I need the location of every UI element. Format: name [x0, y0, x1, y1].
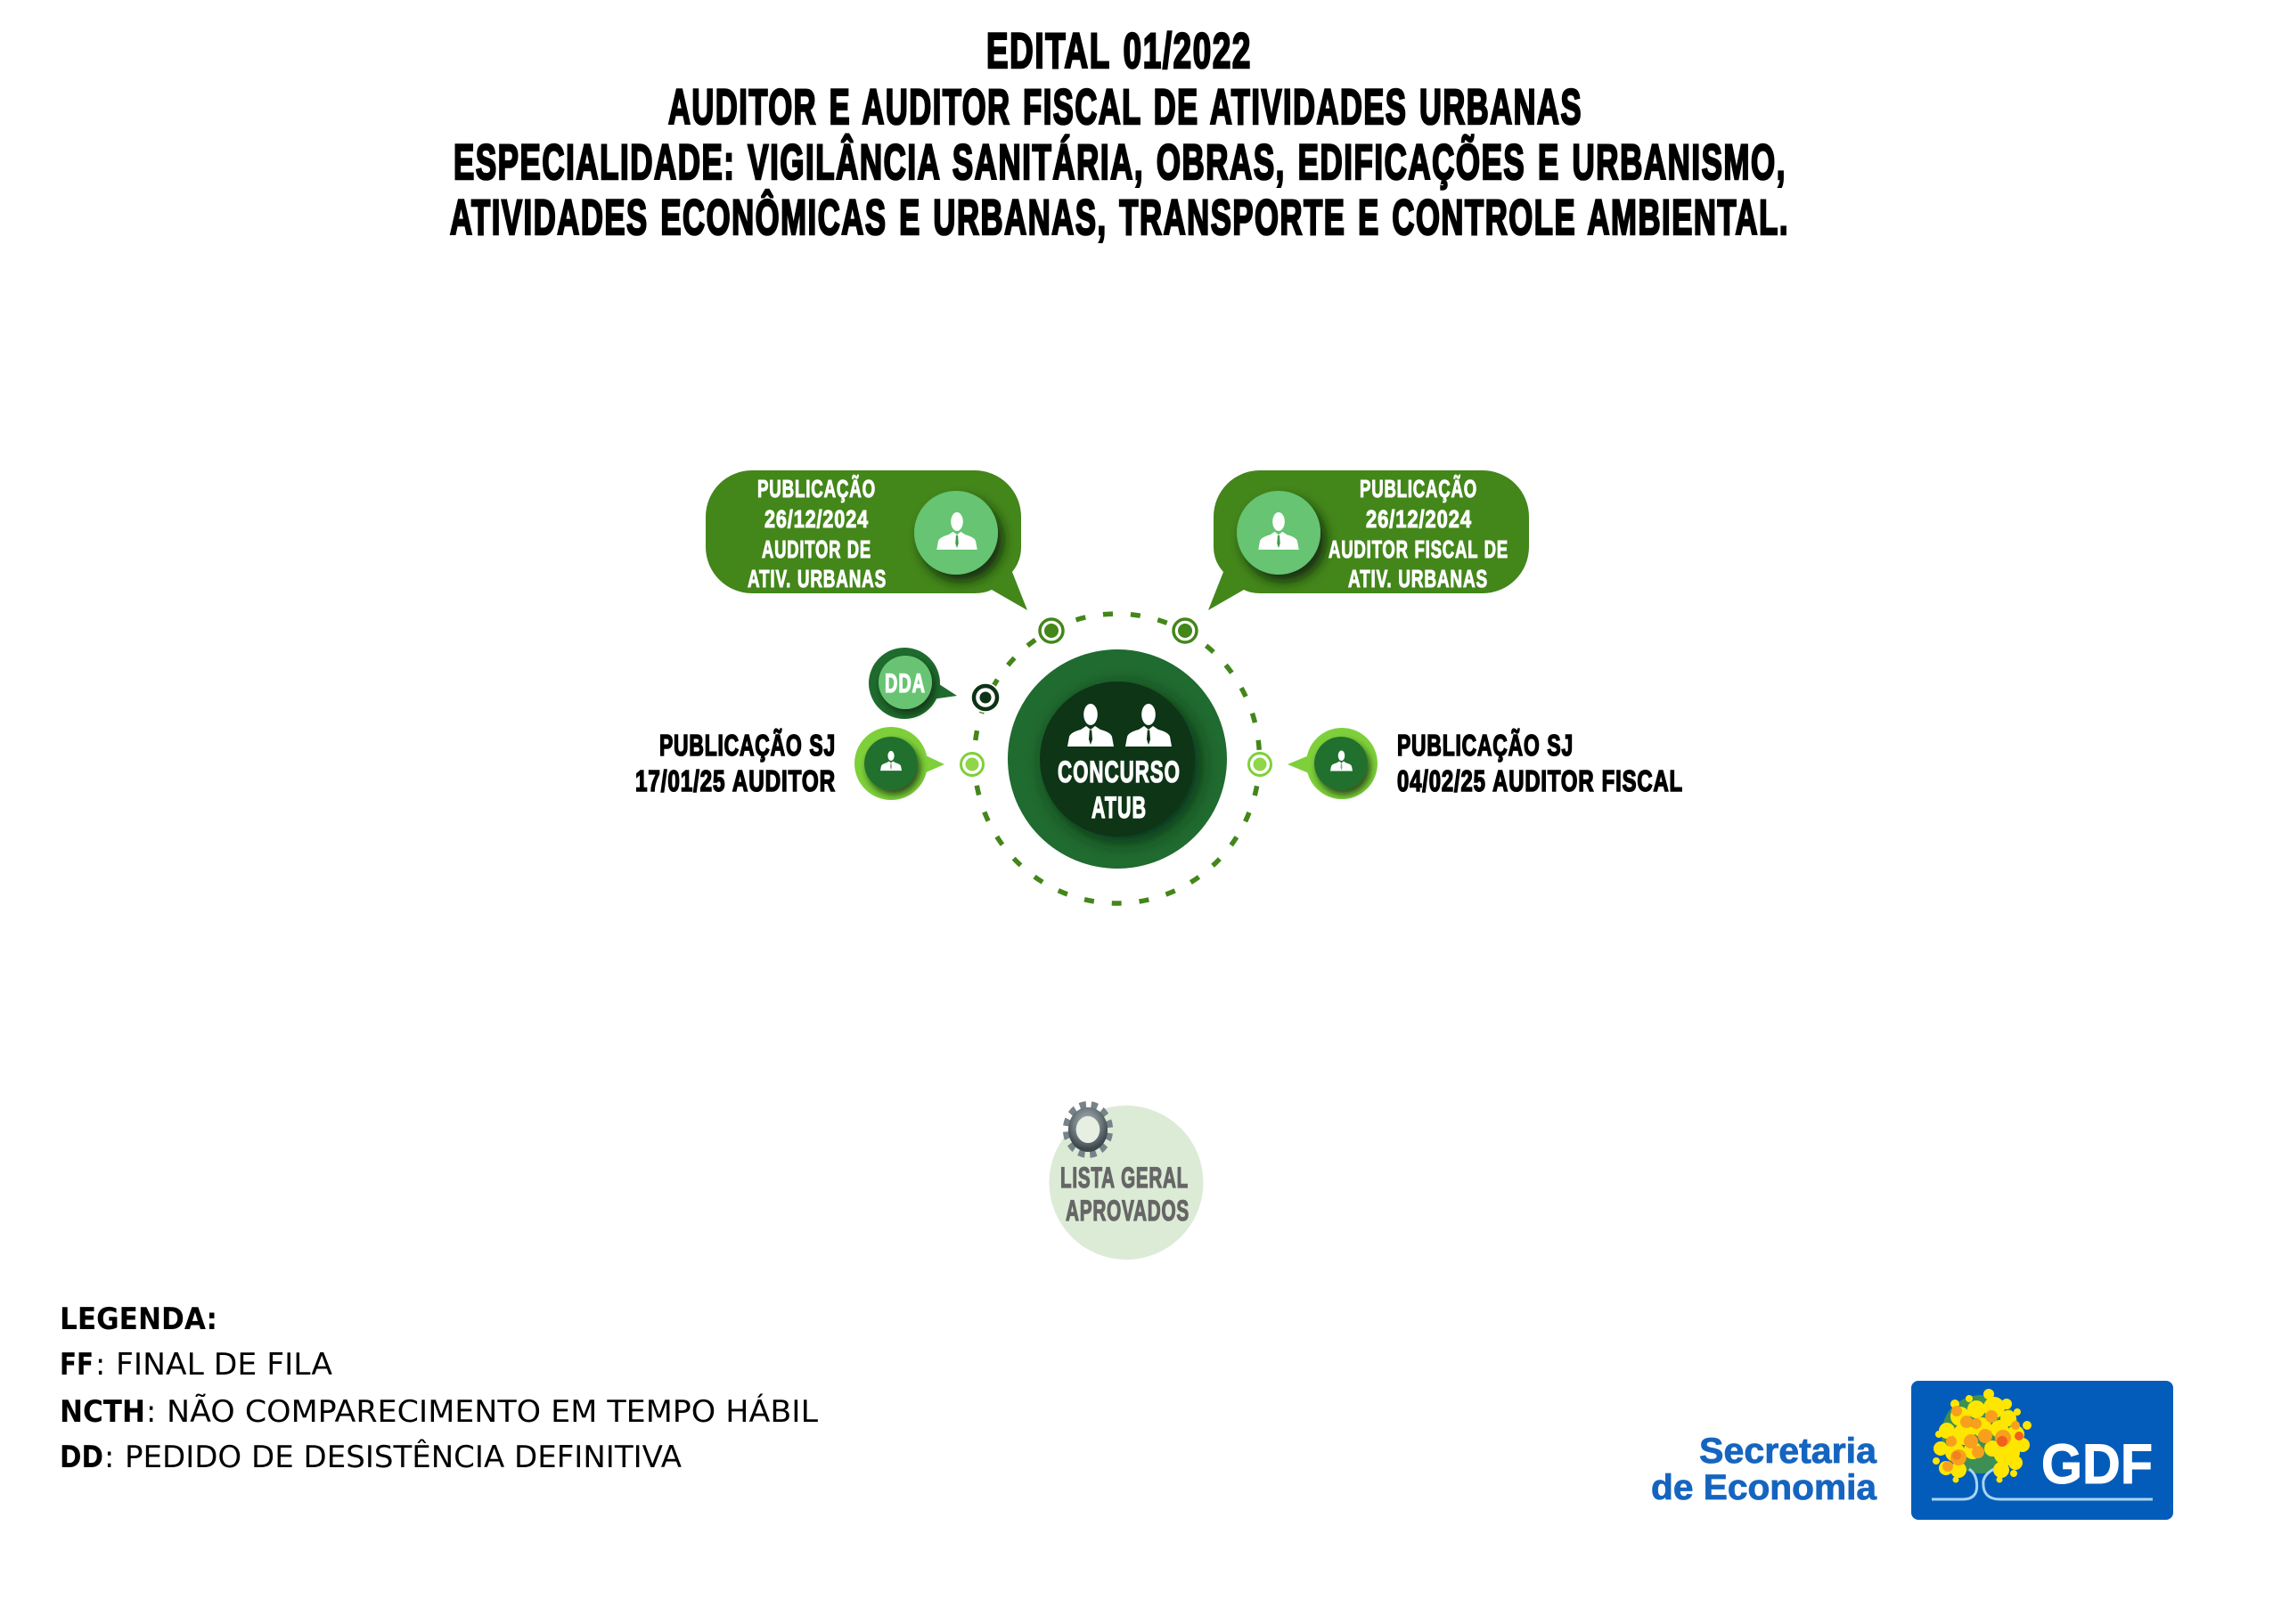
logo: GDF [1911, 1381, 2173, 1520]
node: top right [1170, 616, 1200, 646]
legend: : [95, 1347, 105, 1382]
legend: LEGENDA: [60, 1302, 217, 1336]
logo: GDF: GDF [2041, 1433, 2153, 1496]
logo: Secretaria de Economia [1651, 1432, 1877, 1507]
legend: PEDIDO DE DESISTÊNCIA DEFINITIVA [125, 1439, 682, 1474]
central label [1058, 755, 1181, 825]
title: AUDITOR E AUDITOR FISCAL DE ATIVIDADES URBANAS [668, 78, 1582, 135]
dashed orbit ring [975, 614, 1260, 903]
panel: callout publicação auditor [706, 470, 1027, 610]
callout: DDA: DDA [885, 669, 926, 698]
callout text auditor: AUDITOR DE [762, 535, 871, 563]
text: publicação SJ auditor fiscal: 04/02/25 AUDITOR FISCAL [1397, 764, 1683, 797]
callout text auditor fiscal [1329, 475, 1508, 592]
lista label [1060, 1162, 1190, 1227]
text: publicação SJ auditor fiscal: PUBLICAÇÃO SJ [1397, 729, 1574, 762]
legend: FF [60, 1347, 94, 1382]
callout text auditor [748, 475, 887, 592]
logo: Secretaria de Economia: de Economia [1651, 1468, 1877, 1507]
callout: DDA [869, 648, 957, 719]
icon: avatar auditor [914, 491, 998, 575]
legend: : [146, 1394, 156, 1429]
text: publicação SJ auditor fiscal [1397, 729, 1683, 797]
legend: NCTH [60, 1394, 145, 1429]
central label: ATUB [1091, 791, 1147, 825]
tree roots [1932, 1469, 2153, 1499]
panel: central circle concurso ATUB [1008, 649, 1227, 869]
legend: DD [60, 1440, 103, 1474]
central label: CONCURSO [1058, 755, 1181, 789]
text: publicação SJ auditor [635, 729, 836, 797]
title: EDITAL 01/2022 [986, 22, 1252, 78]
callout text auditor fiscal: AUDITOR FISCAL DE [1329, 535, 1508, 563]
panel: callout publicação auditor fiscal [1208, 470, 1529, 610]
node: top left [1036, 616, 1067, 646]
callout text auditor: PUBLICAÇÃO [757, 475, 876, 502]
callout: publicação SJ auditor icon [854, 727, 944, 800]
text: publicação SJ auditor: PUBLICAÇÃO SJ [659, 729, 836, 762]
callout: publicação SJ auditor fiscal icon [1288, 728, 1378, 799]
node: DDA [970, 682, 1001, 713]
lista label: LISTA GERAL [1060, 1162, 1189, 1194]
legend: FINAL DE FILA [116, 1347, 332, 1382]
callout text auditor fiscal: PUBLICAÇÃO [1360, 475, 1477, 502]
title [450, 22, 1789, 245]
callout text auditor: 26/12/2024 [764, 505, 869, 533]
icon: gear [1064, 1102, 1112, 1157]
legend: : [104, 1440, 114, 1474]
node: left [960, 752, 985, 777]
lista label: APROVADOS [1066, 1195, 1190, 1227]
text: publicação SJ auditor: 17/01/25 AUDITOR [635, 764, 836, 797]
node: right [1247, 752, 1272, 777]
callout text auditor fiscal: 26/12/2024 [1366, 505, 1472, 533]
panel: lista geral aprovados [1050, 1102, 1203, 1260]
callout text auditor: ATIV. URBANAS [748, 565, 887, 592]
icon: two people [1067, 704, 1172, 747]
legend [60, 1302, 818, 1474]
logo: Secretaria de Economia: Secretaria [1699, 1432, 1877, 1471]
icon: yellow tree [1933, 1389, 2032, 1482]
legend: NÃO COMPARECIMENTO EM TEMPO HÁBIL [167, 1393, 818, 1429]
icon: avatar auditor fiscal [1237, 491, 1320, 575]
callout text auditor fiscal: ATIV. URBANAS [1348, 565, 1488, 592]
